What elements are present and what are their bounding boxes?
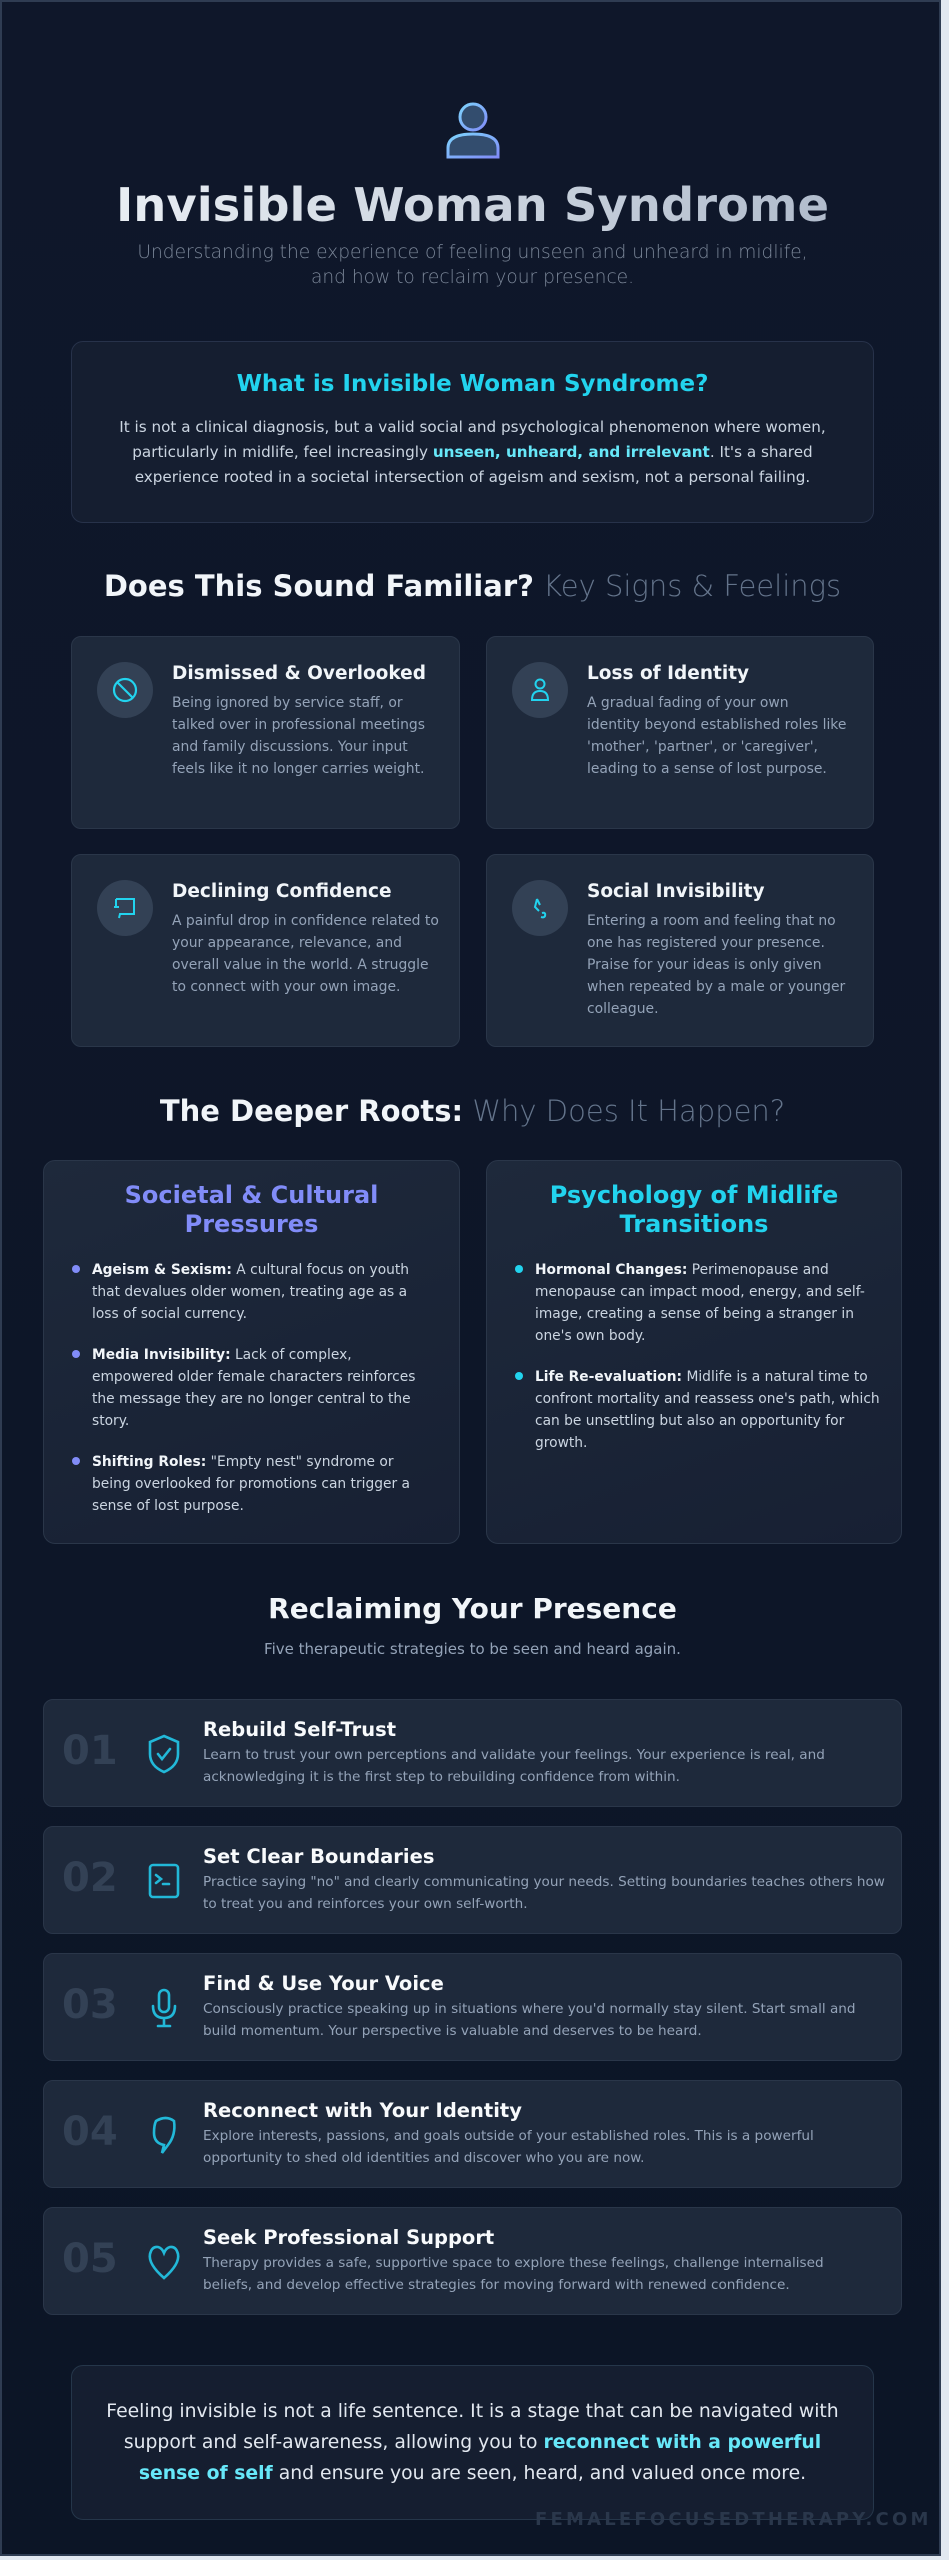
strategy 2: 02 bbox=[62, 1855, 118, 1901]
strategy 2: Set Clear Boundaries bbox=[203, 1845, 434, 1868]
strategy 4: Explore interests, passions, and goals outside of your established roles. This is a powerful opportunity to shed old identities and discover who you are now. bbox=[203, 2128, 814, 2166]
icon: frame bbox=[97, 880, 153, 936]
card: identity bbox=[486, 636, 874, 829]
subtitle: and how to reclaim your presence. bbox=[311, 267, 634, 288]
strategy 1: 01 bbox=[62, 1728, 118, 1774]
card: confidence bbox=[71, 854, 460, 1047]
icon: ban bbox=[97, 662, 153, 718]
heading: familiar: Does This Sound Familiar? Key Signs & Feelings bbox=[104, 569, 841, 603]
strategy 5 bbox=[43, 2207, 902, 2315]
strategy 2: Practice saying "no" and clearly communicating your needs. Setting boundaries teaches others how to treat you and reinforces your own self-worth. bbox=[203, 1874, 885, 1912]
icon: hand bbox=[512, 880, 568, 936]
subtitle: strategies: Five therapeutic strategies to be seen and heard again. bbox=[264, 1640, 681, 1658]
icon: user bbox=[512, 662, 568, 718]
card: dismissed: Dismissed & Overlooked bbox=[172, 663, 426, 684]
title: Invisible Woman Syndrome bbox=[116, 178, 829, 232]
icon: terminal bbox=[148, 1864, 180, 1898]
panel: societal: Shifting Roles: "Empty nest" syndrome or being overlooked for promotions can trigger a sense of lost purpose. bbox=[92, 1454, 410, 1514]
icon: person bbox=[446, 102, 500, 158]
card: social: Social Invisibility bbox=[587, 881, 765, 902]
panel: psychology: Psychology of Midlife bbox=[550, 1181, 838, 1209]
card: dismissed: Being ignored by service staff, or talked over in professional meetings and family discussions. Your input feels like it no longer carries weight. bbox=[172, 695, 425, 777]
icon: heart bbox=[148, 2246, 180, 2280]
panel: societal: Pressures bbox=[185, 1210, 318, 1238]
strategy 1: Learn to trust your own perceptions and validate your feelings. Your experience is real, and acknowledging it is the first step to rebuilding confidence from within. bbox=[203, 1747, 825, 1785]
strategy 1: Rebuild Self-Trust bbox=[203, 1718, 396, 1741]
card: social bbox=[486, 854, 874, 1047]
strategy 4: Reconnect with Your Identity bbox=[203, 2099, 522, 2122]
card: confidence: A painful drop in confidence related to your appearance, relevance, and overall value in the world. A struggle to connect with your own image. bbox=[172, 913, 439, 995]
panel: societal: Societal & Cultural bbox=[125, 1181, 378, 1209]
strategy 3: 03 bbox=[62, 1982, 118, 2028]
card: identity: A gradual fading of your own bbox=[587, 695, 789, 711]
heading: roots: The Deeper Roots: Why Does It Happen? bbox=[160, 1094, 785, 1128]
icon: microphone bbox=[152, 1988, 176, 2028]
text: definition: It is not a clinical diagnosis, but a valid social and psychological phenomenon where women, particularly in midlife, feel increasingly unseen, unheard, and irrelevant. It's a shared experience rooted in a societal intersection of ageism and sexism, not a personal failing. bbox=[119, 418, 826, 486]
card: social: Entering a room and feeling that no one has registered your presence. Praise for your ideas is only given when repeated by a male or younger colleague. bbox=[587, 913, 845, 1017]
card: dismissed bbox=[71, 636, 460, 829]
strategy 3: Consciously practice speaking up in situations where you'd normally stay silent. Start small and build momentum. Your perspective is valuable and deserves to be heard. bbox=[203, 2001, 856, 2039]
card: identity: identity beyond established roles like 'mother', 'partner', or 'caregiver', leading to a sense of lost purpose. bbox=[587, 717, 846, 777]
heading: what is: What is Invisible Woman Syndrome? bbox=[237, 371, 708, 397]
panel: conclusion bbox=[71, 2365, 874, 2520]
icon: shield bbox=[148, 1734, 180, 1774]
panel: psychology: Life Re-evaluation: Midlife is a natural time to confront mortality and reassess one's path, which can be unsettling but also an opportunity for growth. bbox=[535, 1369, 880, 1451]
strategy 4 bbox=[43, 2080, 902, 2188]
panel: psychology bbox=[486, 1160, 902, 1544]
icon: head bbox=[152, 2116, 176, 2154]
subtitle bbox=[137, 242, 808, 288]
strategy 2 bbox=[43, 1826, 902, 1934]
card: confidence: Declining Confidence bbox=[172, 881, 392, 902]
panel: societal: Ageism & Sexism: A cultural focus on youth that devalues older women, treating age as a loss of social currency. bbox=[92, 1262, 409, 1322]
watermark: FEMALEFOCUSEDTHERAPY.COM bbox=[535, 2509, 932, 2530]
panel: what is bbox=[71, 341, 874, 523]
strategy 5: Therapy provides a safe, supportive space to explore these feelings, challenge internalised beliefs, and develop effective strategies for moving forward with renewed confidence. bbox=[203, 2255, 824, 2293]
card: identity: Loss of Identity bbox=[587, 663, 749, 684]
strategy 3: Find & Use Your Voice bbox=[203, 1972, 444, 1995]
subtitle: Understanding the experience of feeling unseen and unheard in midlife, bbox=[137, 242, 808, 263]
strategy 4: 04 bbox=[62, 2109, 118, 2155]
heading: reclaiming: Reclaiming Your Presence bbox=[268, 1592, 677, 1625]
panel: societal bbox=[43, 1160, 460, 1544]
panel: psychology: Transitions bbox=[620, 1210, 768, 1238]
strategy 1 bbox=[43, 1699, 902, 1807]
text: conclusion: Feeling invisible is not a life sentence. It is a stage that can be navigated with support and self-awareness, allowing you to reconnect with a powerful sense of self and ensure you are seen, heard, and valued once more. bbox=[106, 2401, 839, 2484]
strategy 5: 05 bbox=[62, 2236, 118, 2282]
strategy 3 bbox=[43, 1953, 902, 2061]
strategy 5: Seek Professional Support bbox=[203, 2226, 494, 2249]
panel: psychology: Hormonal Changes: Perimenopause and menopause can impact mood, energy, and self-image, creating a sense of being a stranger in one's own body. bbox=[535, 1262, 865, 1344]
panel: societal: Media Invisibility: Lack of complex, empowered older female characters reinforces the message they are no longer central to the story. bbox=[92, 1347, 415, 1429]
